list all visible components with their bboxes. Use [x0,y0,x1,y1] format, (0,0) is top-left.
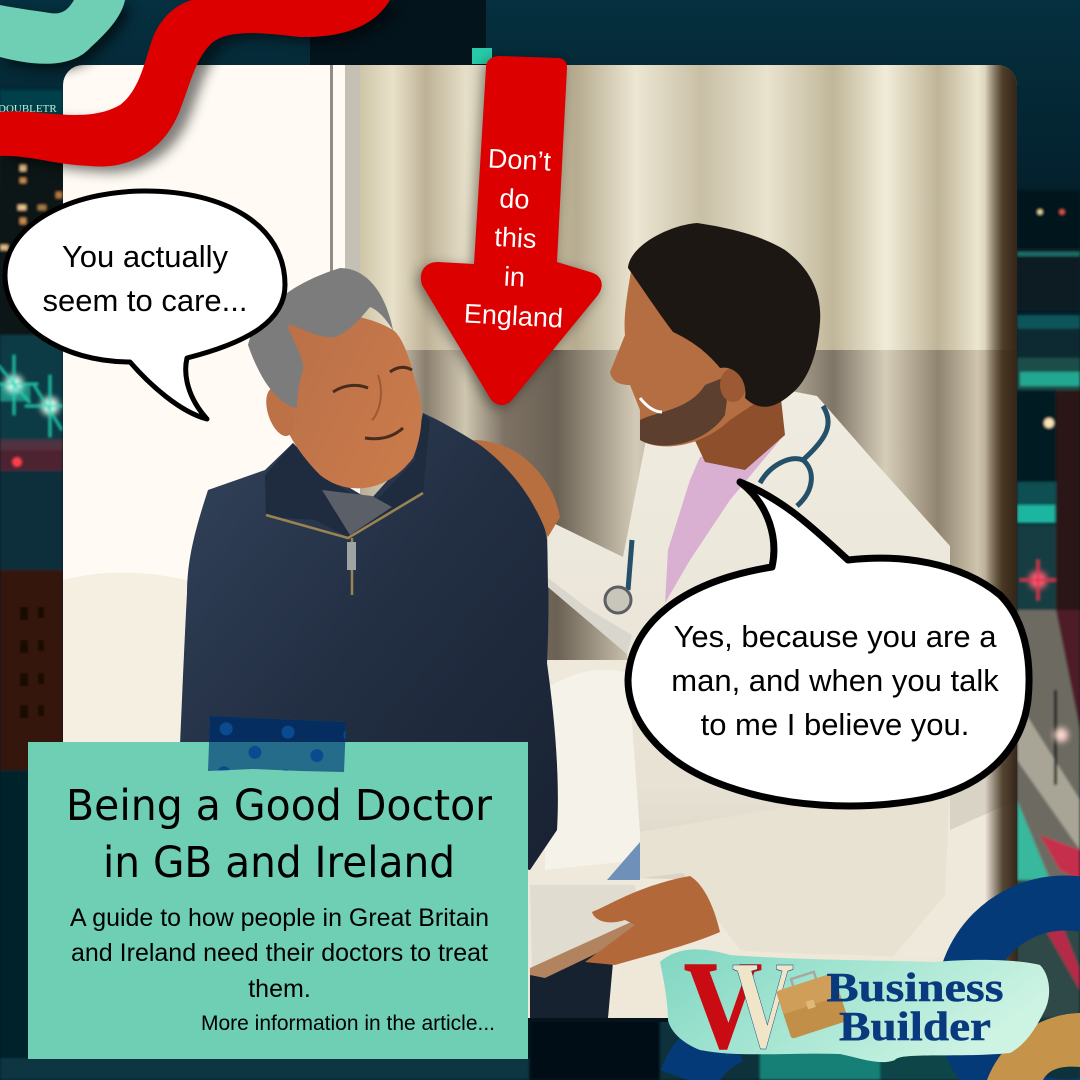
collar [265,413,430,538]
sleeve shadow [548,578,632,654]
title: in GB and Ireland [103,838,455,888]
bed sheets [63,572,188,742]
speech bubble: patient [5,191,285,419]
decorative arc: gold [987,1013,1080,1080]
torn paper [660,949,1049,1062]
cream V: V [732,937,794,1075]
ear [266,389,290,436]
coat back [547,392,950,879]
decorative swoosh: teal [0,0,131,70]
smile [640,398,662,412]
decorative swoosh: red [0,0,400,173]
arrow shadow [418,59,599,408]
description: A guide to how people in Great Britain [70,904,489,932]
hand on shoulder [473,440,560,537]
arrow text: this [494,222,537,254]
ear [720,368,746,402]
arrow text: do [499,183,530,215]
bubble text: You actually [62,239,229,274]
arrow text: Don’t [487,143,552,177]
clipboard [530,885,640,968]
description: and Ireland need their doctors to treat [71,939,488,967]
briefcase [774,966,849,1039]
bubble outline [628,482,1029,806]
pink shirt [665,440,780,603]
logo text: Builder [839,1003,991,1049]
zipper [266,493,423,595]
logo text: Business [826,964,1004,1010]
blue triangle [607,842,640,880]
title card [28,716,528,1059]
title: Being a Good Doctor [66,781,492,831]
doctor [473,223,950,1018]
photo panel: patient and doctor [63,65,1017,1018]
arrow: Don't do this in England [418,56,602,408]
city: right strip [1017,190,1080,1080]
arrow text: in [503,261,526,293]
arrow text: England [463,298,564,334]
card background [28,742,528,1059]
doctor hair [628,223,820,407]
red V: V [684,937,762,1075]
logo: VW Business Builder [660,937,1049,1075]
tape [208,716,346,772]
doctor face [610,265,760,446]
dark jeans [530,952,613,1018]
undershirt [322,490,392,535]
stethoscope [628,406,828,590]
speech bubble: doctor [628,482,1029,806]
bubble text: to me I believe you. [701,707,969,742]
eyes, mouth [333,367,412,439]
patient [180,268,558,870]
doctor neck [695,401,785,470]
panel bottom dark band [528,1018,668,1022]
bubble text: man, and when you talk [671,663,999,698]
city: dark tower at top [310,0,486,65]
article note: More information in the article... [201,1012,495,1035]
arrow text [463,143,564,334]
hair [248,268,393,408]
description: them. [248,975,311,1003]
beard [640,375,730,446]
arrow shape [421,56,602,405]
panel right edge shade [985,65,1017,1018]
city: trees under panel [530,1018,1080,1080]
decorative arc: navy lower left [688,1035,730,1080]
hand with clipboard [585,876,720,965]
decorative arc: navy lower right [963,903,1080,1080]
city: left strip [0,90,530,1080]
coat lower [640,839,946,956]
bubble outline [5,191,285,419]
sheet foreground [608,952,893,1018]
neck and face [287,318,422,488]
curtain: lower band [360,350,1017,680]
bubble text: Yes, because you are a [674,619,997,654]
bubble text: seem to care... [42,283,248,318]
window: bright wall [63,65,360,580]
sweater [180,413,558,870]
curtain: upper band [360,65,1017,350]
